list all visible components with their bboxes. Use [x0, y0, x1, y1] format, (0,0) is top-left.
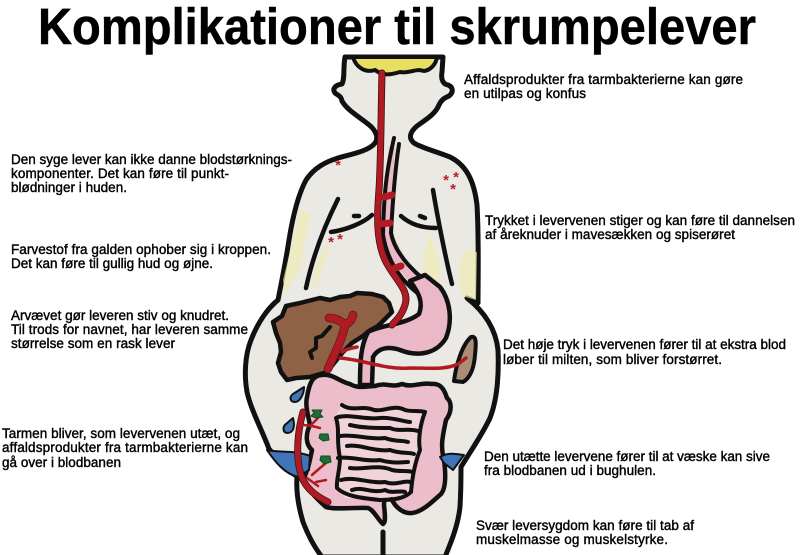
text: scar tissue in the liver — [11, 308, 248, 351]
text: muscle loss — [476, 518, 694, 547]
arm lines — [306, 190, 452, 555]
text: jaundice — [11, 242, 271, 271]
bacteria — [311, 410, 331, 464]
text: scar tissue in the liver: størrelse som en rask lever — [11, 336, 176, 351]
text: clotting components: komponenter. Det kan føre til punkt- — [11, 166, 229, 181]
skin bleedings — [328, 157, 459, 251]
text: enlarged spleen: løber til milten, som bliver forstørret. — [503, 352, 722, 367]
large intestine — [303, 375, 451, 524]
text: clotting components: Den syge lever kan ikke danne blodstørknings- — [11, 152, 292, 167]
brain — [353, 57, 437, 74]
fluid droplets — [284, 387, 304, 433]
text: leaky intestine: affaldsprodukter fra tarmbakterierne kan — [2, 440, 248, 455]
text: jaundice: Farvestof fra galden ophober sig i kroppen. — [11, 242, 271, 257]
text: ascites: Den utætte levervene fører til at væske kan sive — [484, 449, 770, 464]
text: enlarged spleen: Det høje tryk i levervenen fører til at ekstra blod — [503, 337, 786, 352]
text: leaky intestine — [2, 426, 248, 470]
text: jaundice: Det kan føre til gullig hud og øjne. — [11, 256, 213, 271]
text: toxins affect the brain: Affaldsprodukter fra tarmbakterierne kan gøre — [464, 72, 743, 87]
skin bleedings: * — [453, 169, 459, 186]
text: leaky intestine: Tarmen bliver, som levervenen utæt, og — [2, 426, 240, 441]
skin bleedings: * — [337, 231, 343, 248]
spleen — [454, 337, 476, 382]
text: ascites — [484, 449, 770, 478]
skin bleedings: * — [450, 181, 456, 198]
text: varices — [485, 213, 795, 242]
body silhouette — [245, 57, 498, 555]
small intestine — [335, 405, 425, 500]
portal vein system — [298, 73, 466, 502]
illustration: body with organs — [245, 57, 498, 555]
stomach — [360, 275, 450, 385]
text: enlarged spleen — [503, 337, 786, 367]
esophagus — [382, 147, 441, 295]
text: clotting components — [11, 152, 292, 195]
text: ascites: fra blodbanen ud i bughulen. — [484, 463, 656, 478]
skin bleedings: * — [335, 157, 341, 174]
text: clotting components: blødninger i huden. — [11, 180, 127, 195]
yellow skin tint — [283, 210, 477, 300]
text: scar tissue in the liver: Arvævet gør leveren stiv og knudret. — [11, 308, 229, 323]
text: toxins affect the brain: en utilpas og konfus — [464, 86, 586, 101]
skin bleedings: * — [443, 172, 449, 189]
skin bleedings: * — [328, 234, 334, 251]
text: varices: af åreknuder i mavesækken og spiserøret — [485, 227, 735, 242]
text: scar tissue in the liver: Til trods for navnet, har leveren samme — [11, 322, 248, 337]
text: muscle loss: muskelmasse og muskelstyrke. — [476, 532, 668, 547]
text: varices: Trykket i levervenen stiger og kan føre til dannelsen — [485, 213, 795, 228]
text: muscle loss: Svær leversygdom kan føre til tab af — [476, 518, 694, 533]
liver — [273, 293, 392, 380]
text: leaky intestine: gå over i blodbanen — [2, 455, 121, 470]
blue fluid patches — [267, 450, 464, 477]
text: toxins affect the brain — [464, 72, 743, 101]
